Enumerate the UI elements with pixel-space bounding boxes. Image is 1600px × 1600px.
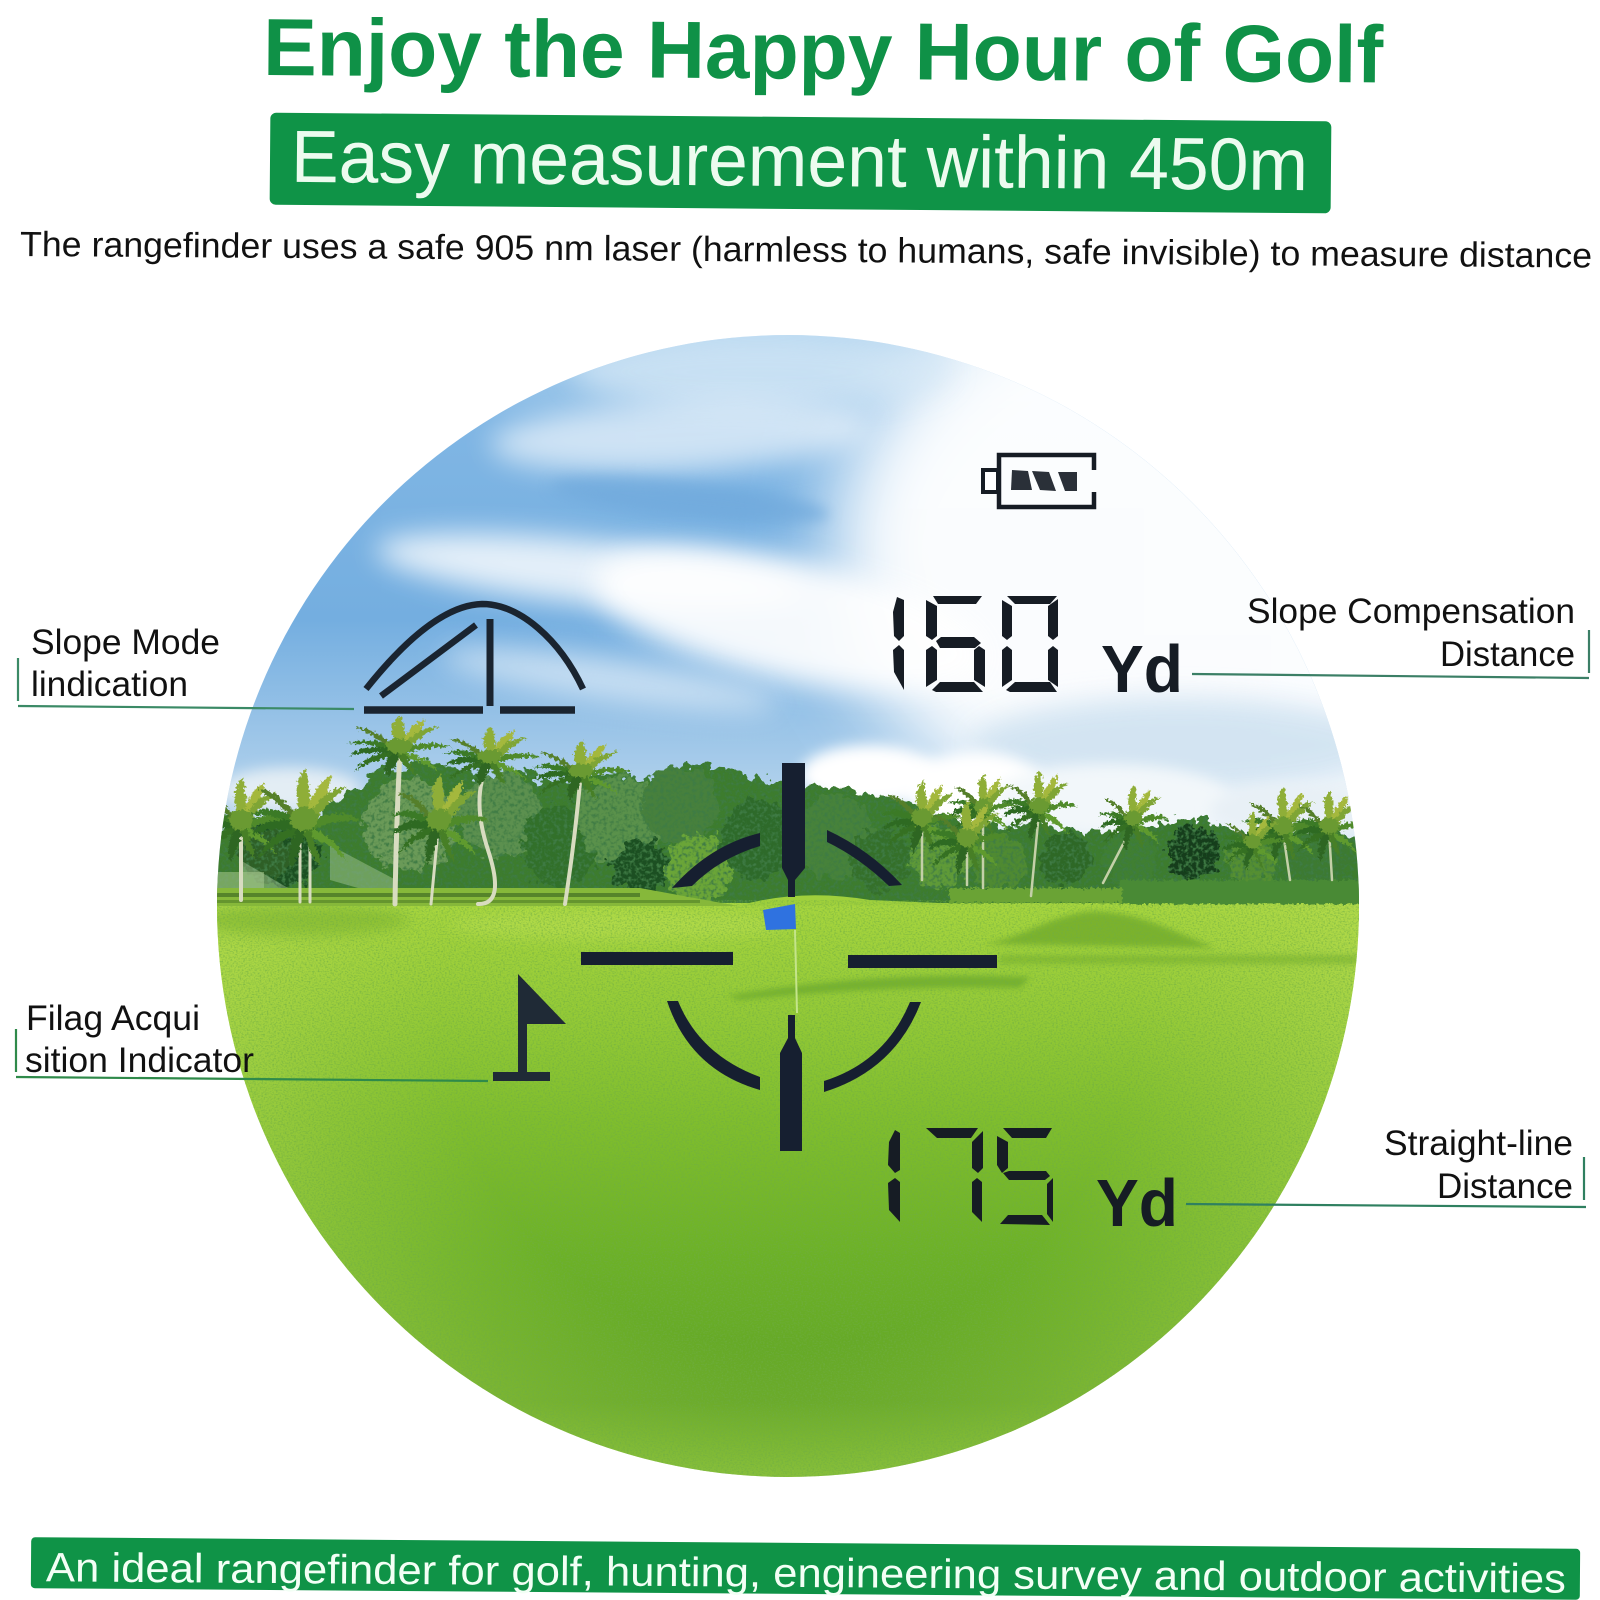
foreground palms and ground strips <box>195 715 1368 906</box>
tree canopy <box>210 762 1365 915</box>
straight-line reading: 175 Yd: 175 <box>888 1142 1053 1242</box>
callout: straight-line distance: Distance <box>1437 1167 1573 1206</box>
subtitle banner <box>270 113 1331 213</box>
icon: flag acquisition indicator <box>493 974 566 1081</box>
unit label: Yd <box>1096 1166 1178 1241</box>
reticle crosshair <box>581 763 997 1151</box>
unit label: Yd <box>1101 632 1183 707</box>
callout: straight-line distance <box>1186 1124 1586 1207</box>
slope compensation reading: 160 Yd: 160 <box>893 608 1058 708</box>
icon: battery level <box>983 455 1094 507</box>
callout: flag acquisition indicator: sition Indicator <box>25 1041 254 1080</box>
banner text: Easy measurement within 450m <box>291 115 1308 206</box>
slope compensation reading: 160 Yd <box>893 596 1183 708</box>
callout: slope compensation distance: Slope Compensation <box>1247 592 1575 631</box>
callout: slope mode indication: lindication <box>31 665 188 704</box>
callout: straight-line distance: Straight-line <box>1384 1124 1573 1163</box>
title: Enjoy the Happy Hour of Golf <box>263 3 1384 100</box>
grass fairway <box>190 895 1380 1493</box>
footer banner <box>31 1537 1580 1600</box>
panel: rangefinder viewfinder scene <box>217 335 1359 1477</box>
sky <box>218 335 1358 878</box>
footer text: An ideal rangefinder for golf, hunting, engineering survey and outdoor activities <box>46 1544 1566 1600</box>
callout: flag acquisition indicator <box>16 999 488 1081</box>
straight-line reading: 175 Yd <box>888 1128 1178 1242</box>
callout: flag acquisition indicator: Filag Acqui <box>26 999 200 1038</box>
callout: slope compensation distance <box>1192 592 1589 678</box>
description line: The rangefinder uses a safe 905 nm laser (harmless to humans, safe invisible) to measure distance <box>20 225 1592 276</box>
callout: slope mode indication <box>18 623 354 709</box>
callout: slope mode indication: Slope Mode <box>31 623 220 662</box>
target flag on green <box>763 904 797 1013</box>
callout: slope compensation distance: Distance <box>1440 635 1575 674</box>
icon: slope mode indicator <box>364 604 583 710</box>
